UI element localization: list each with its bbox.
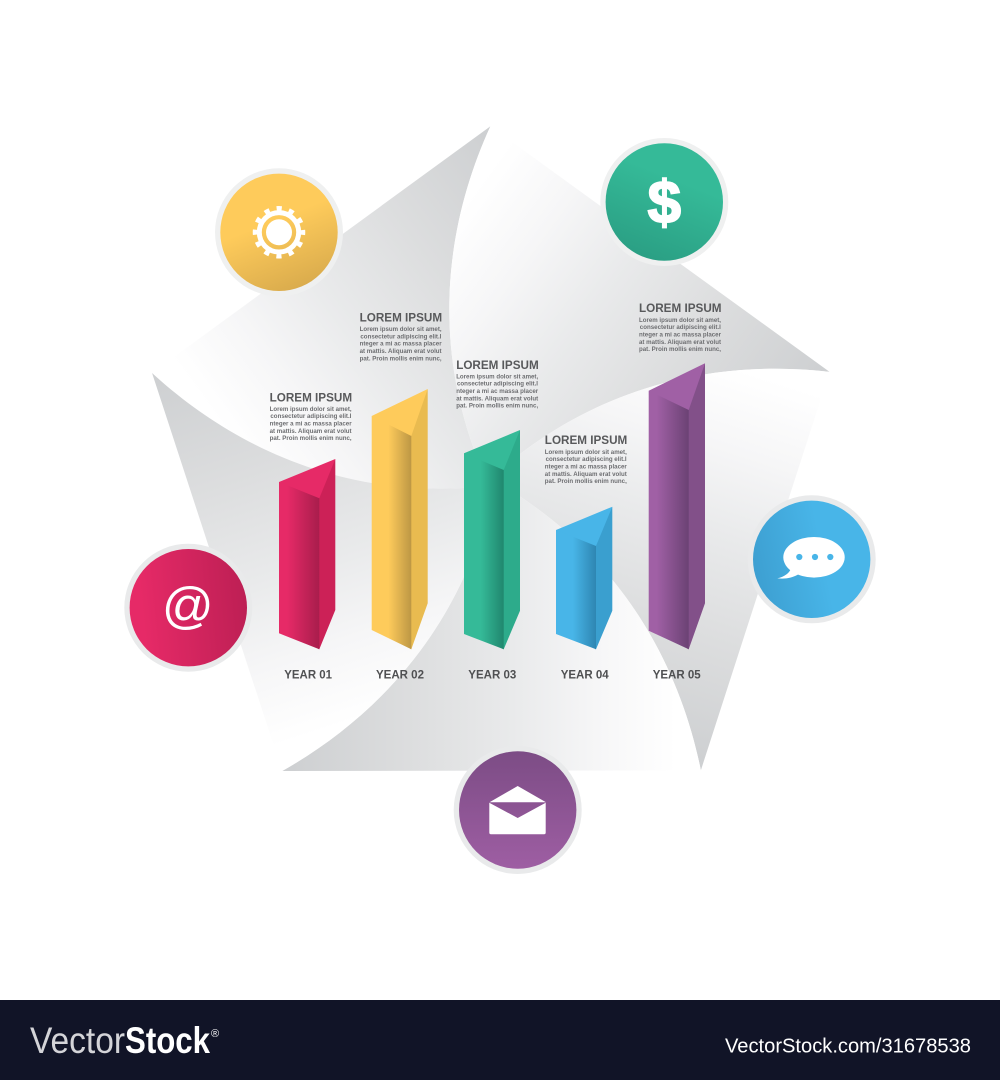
year labels: YEAR 02	[376, 667, 424, 681]
text block: year 02: Lorem ipsum dolor sit amet,	[360, 326, 442, 333]
text block: year 04: Lorem ipsum dolor sit amet,	[545, 449, 627, 456]
text block: year 05	[639, 301, 722, 353]
footer bar	[0, 1000, 1000, 1080]
text block: year 02: LOREM IPSUM	[360, 310, 442, 324]
text block: year 01: pat. Proin mollis enim nunc,	[270, 435, 352, 442]
text block: year 02: at mattis. Aliquam erat volut	[360, 348, 442, 355]
text block: year 05: Lorem ipsum dolor sit amet,	[639, 317, 721, 324]
icon: envelope badge	[454, 746, 582, 874]
blade: bottom	[282, 478, 769, 970]
blade: left	[47, 372, 497, 807]
icon: gear badge	[215, 168, 343, 296]
year labels: YEAR 01	[284, 667, 332, 681]
icon: speech bubble badge	[748, 495, 876, 623]
text block: year 03	[456, 358, 539, 410]
icon: dollar badge	[600, 138, 728, 266]
text block: year 01: at mattis. Aliquam erat volut	[270, 428, 352, 435]
blade: top	[152, 126, 491, 489]
blade: lower right	[487, 278, 975, 771]
text block: year 03: consectetur adipiscing elit.I	[457, 381, 538, 388]
text block: year 05: pat. Proin mollis enim nunc,	[639, 346, 721, 353]
text block: year 04: pat. Proin mollis enim nunc,	[545, 478, 627, 485]
text block: year 01	[270, 390, 352, 442]
icon: at sign badge	[124, 544, 252, 672]
text block: year 05: nteger a mi ac massa placer	[639, 332, 721, 338]
text block: year 05: LOREM IPSUM	[639, 301, 722, 315]
text block: year 01: LOREM IPSUM	[270, 390, 352, 404]
year labels: YEAR 04	[561, 667, 609, 681]
text block: year 05: at mattis. Aliquam erat volut	[639, 339, 722, 346]
footer logo: Stock	[125, 1020, 210, 1061]
text block: year 01: Lorem ipsum dolor sit amet,	[270, 406, 352, 413]
text block: year 03: nteger a mi ac massa placer	[456, 388, 539, 395]
text block: year 03: at mattis. Aliquam erat volut	[456, 395, 539, 402]
text block: year 02: consectetur adipiscing elit.I	[360, 333, 442, 340]
bar: year 02	[372, 389, 428, 649]
text block: year 05: consectetur adipiscing elit.I	[640, 324, 721, 331]
text block: year 03: LOREM IPSUM	[456, 358, 539, 372]
icon: at sign badge: @	[162, 577, 214, 634]
bar: year 05	[649, 363, 705, 649]
footer logo	[30, 1020, 219, 1061]
footer logo: Vector	[30, 1020, 125, 1061]
text block: year 03: pat. Proin mollis enim nunc,	[456, 403, 538, 410]
bar: year 01	[279, 459, 335, 649]
year labels: YEAR 05	[653, 667, 701, 681]
text block: year 04: consectetur adipiscing elit.I	[546, 456, 627, 463]
text block: year 02: nteger a mi ac massa placer	[360, 341, 442, 348]
bar: year 03	[464, 430, 520, 649]
text block: year 01: nteger a mi ac massa placer	[270, 420, 352, 428]
footer logo: ®	[211, 1028, 219, 1040]
text block: year 01: consectetur adipiscing elit.I	[270, 413, 352, 420]
year labels	[284, 667, 701, 681]
text block: year 03: Lorem ipsum dolor sit amet,	[456, 373, 538, 380]
text block: year 04	[545, 433, 628, 485]
text block: year 04: LOREM IPSUM	[545, 433, 627, 447]
blade: upper right	[380, 50, 830, 484]
text block: year 02	[360, 310, 442, 362]
bar: year 04	[556, 507, 612, 649]
pinwheel of five blades	[47, 50, 975, 970]
bar chart	[279, 363, 705, 649]
text block: year 04: nteger a mi ac massa placer	[545, 464, 627, 470]
icon: dollar badge: $	[648, 169, 681, 236]
text block: year 04: at mattis. Aliquam erat volut	[545, 471, 628, 478]
text block: year 02: pat. Proin mollis enim nunc,	[360, 355, 442, 362]
year labels: YEAR 03	[468, 667, 517, 681]
footer url: VectorStock.com/31678538	[725, 1036, 971, 1058]
